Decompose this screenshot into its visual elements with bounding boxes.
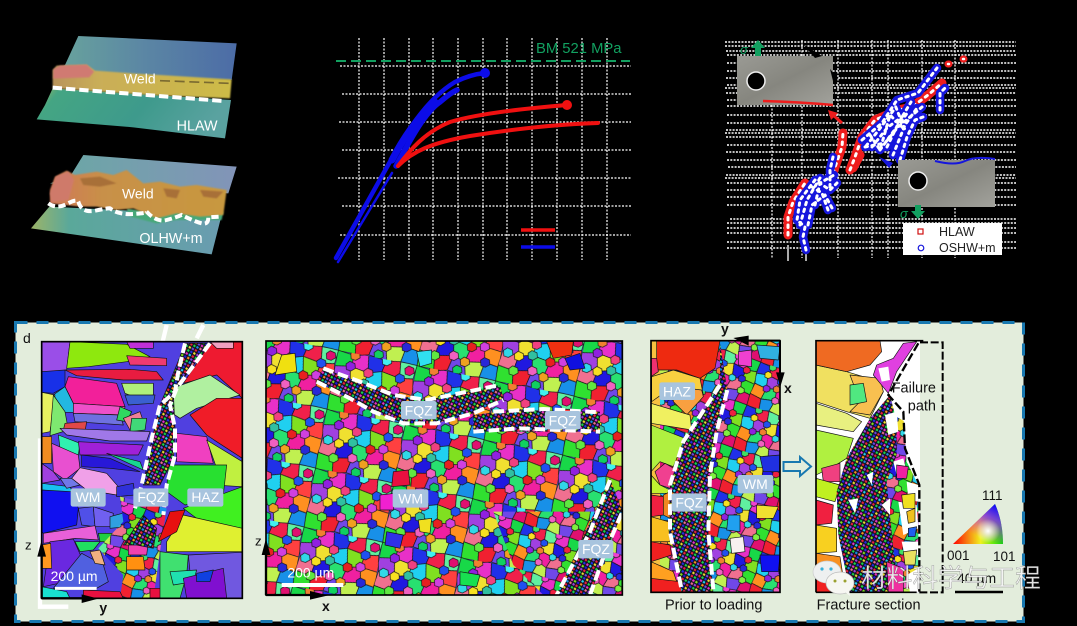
arrows to specimens [828,110,893,168]
panel: EBSD maps [16,320,1024,622]
chart: stress-strain curves [336,38,631,262]
axes and scale bar: 200 µm [51,568,98,584]
legend: OSHW+m [939,241,996,255]
caption: Prior to loading [665,598,762,614]
legend: HLAW [939,225,975,239]
labels: FQZ [405,402,433,418]
map: transverse section [25,325,242,616]
labels: HAZ [663,383,691,399]
panel: weld surface topography [31,36,237,254]
data series: OSHW+m [797,68,945,250]
labels: HAZ [191,489,220,505]
failure path label: Failure [892,381,936,397]
labels: FQZ [582,541,610,557]
chart: fatigue crack data [725,40,1016,261]
map: prior to loading [651,320,792,614]
specimen: HLAW fracture [737,44,838,105]
legend swatches [521,230,555,247]
axes: x [784,380,792,396]
surface map: OLHW+m: Weld [122,185,154,201]
inverse pole figure legend: 101 [993,549,1016,564]
labels: FQZ [675,494,704,510]
axes and scale bar [25,537,107,616]
labels: WM [398,491,423,507]
axes and scale bar [255,534,343,614]
labels: WM [76,489,100,505]
surface map: HLAW: Weld [124,70,156,86]
failure path label [892,381,936,415]
axes: y [721,320,729,336]
panel letter: d [23,330,31,346]
load arrow up: σ [740,42,749,57]
labels [71,488,223,507]
curves: HLAW [398,100,598,166]
load arrow down: σ [900,206,909,221]
labels: WM [743,476,768,492]
axes and scale bar: z [255,534,262,549]
icon: chat bubbles [813,561,854,596]
watermark text: 材料科学与工程 [861,558,1041,595]
map: fracture section [816,341,943,614]
inverse pole figure legend [947,488,1016,564]
labels [393,401,613,558]
surface map: OLHW+m: OLHW+m [139,231,203,247]
watermark [813,558,1041,596]
map: longitudinal section [255,341,622,614]
curves: OSHW+m [336,68,490,262]
surface map: HLAW: HLAW [177,119,218,135]
load arrow up [740,40,765,57]
axes and scale bar: x [322,598,330,614]
labels: FQZ [137,489,166,505]
inverse pole figure legend: 111 [982,488,1003,503]
axes and scale bar: y [99,600,107,616]
legend [903,223,1002,255]
load arrow down [900,205,925,221]
inverse pole figure legend: 001 [947,548,970,563]
scale bar: 40 µm: 40 µm [957,570,996,586]
data series: HLAW [788,59,964,235]
surface map: HLAW [37,36,237,138]
axes [721,320,792,396]
arrow: loading to fracture [784,457,811,476]
axes and scale bar: 200 µm [287,565,334,581]
labels: FQZ [549,412,577,428]
surface map: OLHW+m [31,155,237,254]
labels [659,382,773,512]
caption: Fracture section [817,598,921,614]
base metal strength line: BM 521 MPa [536,41,622,57]
scale bar: 40 µm [955,570,1003,592]
failure path label: path [908,399,936,415]
specimen: OSHW+m fracture [898,158,995,207]
axes and scale bar: z [25,537,32,552]
failure path outline [888,342,943,592]
